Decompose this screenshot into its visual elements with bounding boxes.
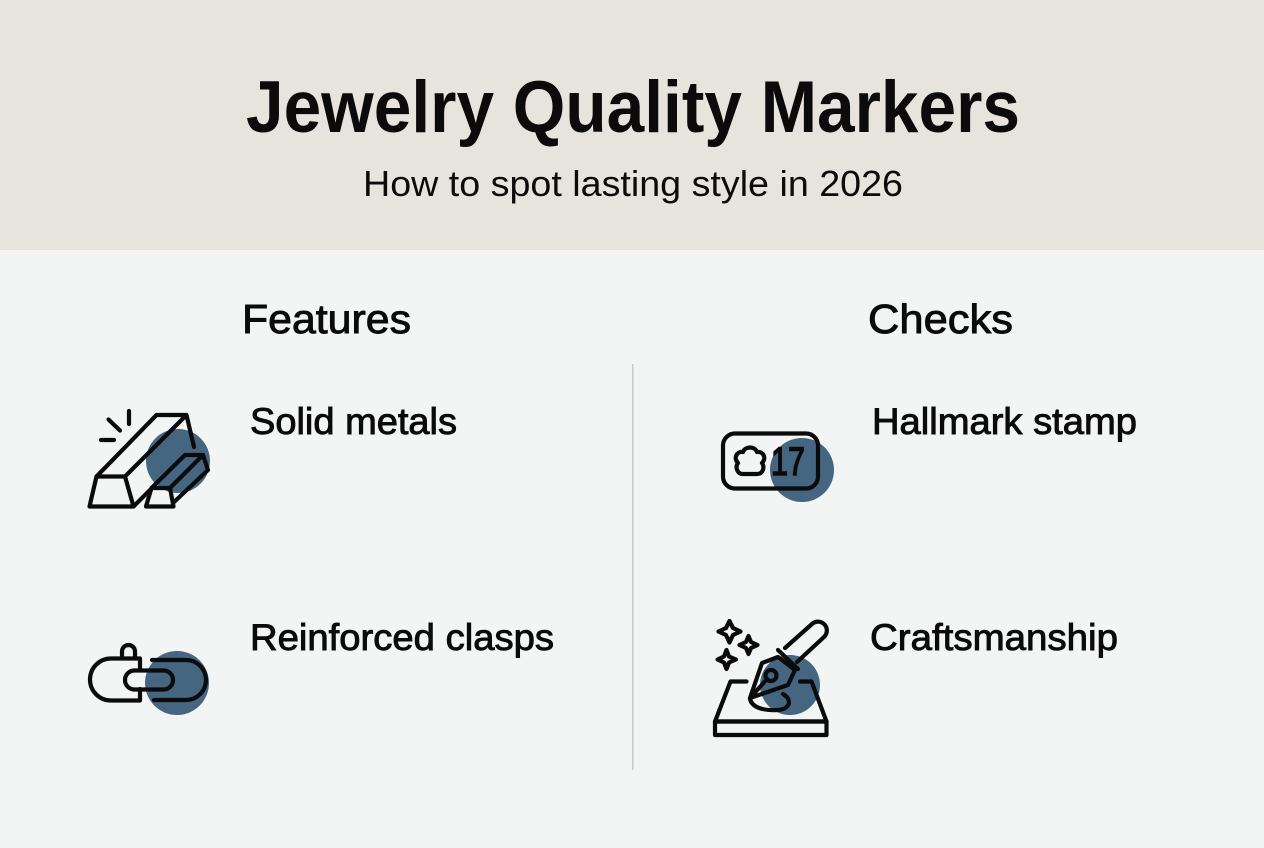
title: Jewelry Quality Markers	[246, 67, 1020, 148]
label: Craftsmanship: Craftsmanship	[870, 617, 1118, 658]
header band	[0, 0, 1264, 250]
icon: hallmark stamp: 17	[771, 440, 805, 484]
icon: fountain pen and tablet	[715, 621, 827, 735]
icon: metal bars	[90, 411, 210, 506]
label: Solid metals: Solid metals	[250, 401, 457, 442]
icon: hallmark stamp	[723, 434, 834, 502]
heading: Checks: Checks	[868, 296, 1013, 342]
subtitle: How to spot lasting style in 2026	[363, 163, 903, 204]
label: Hallmark stamp: Hallmark stamp	[872, 401, 1137, 442]
label: Reinforced clasps: Reinforced clasps	[250, 617, 554, 658]
heading: Features: Features	[242, 296, 411, 342]
icon: clasp	[90, 645, 209, 715]
